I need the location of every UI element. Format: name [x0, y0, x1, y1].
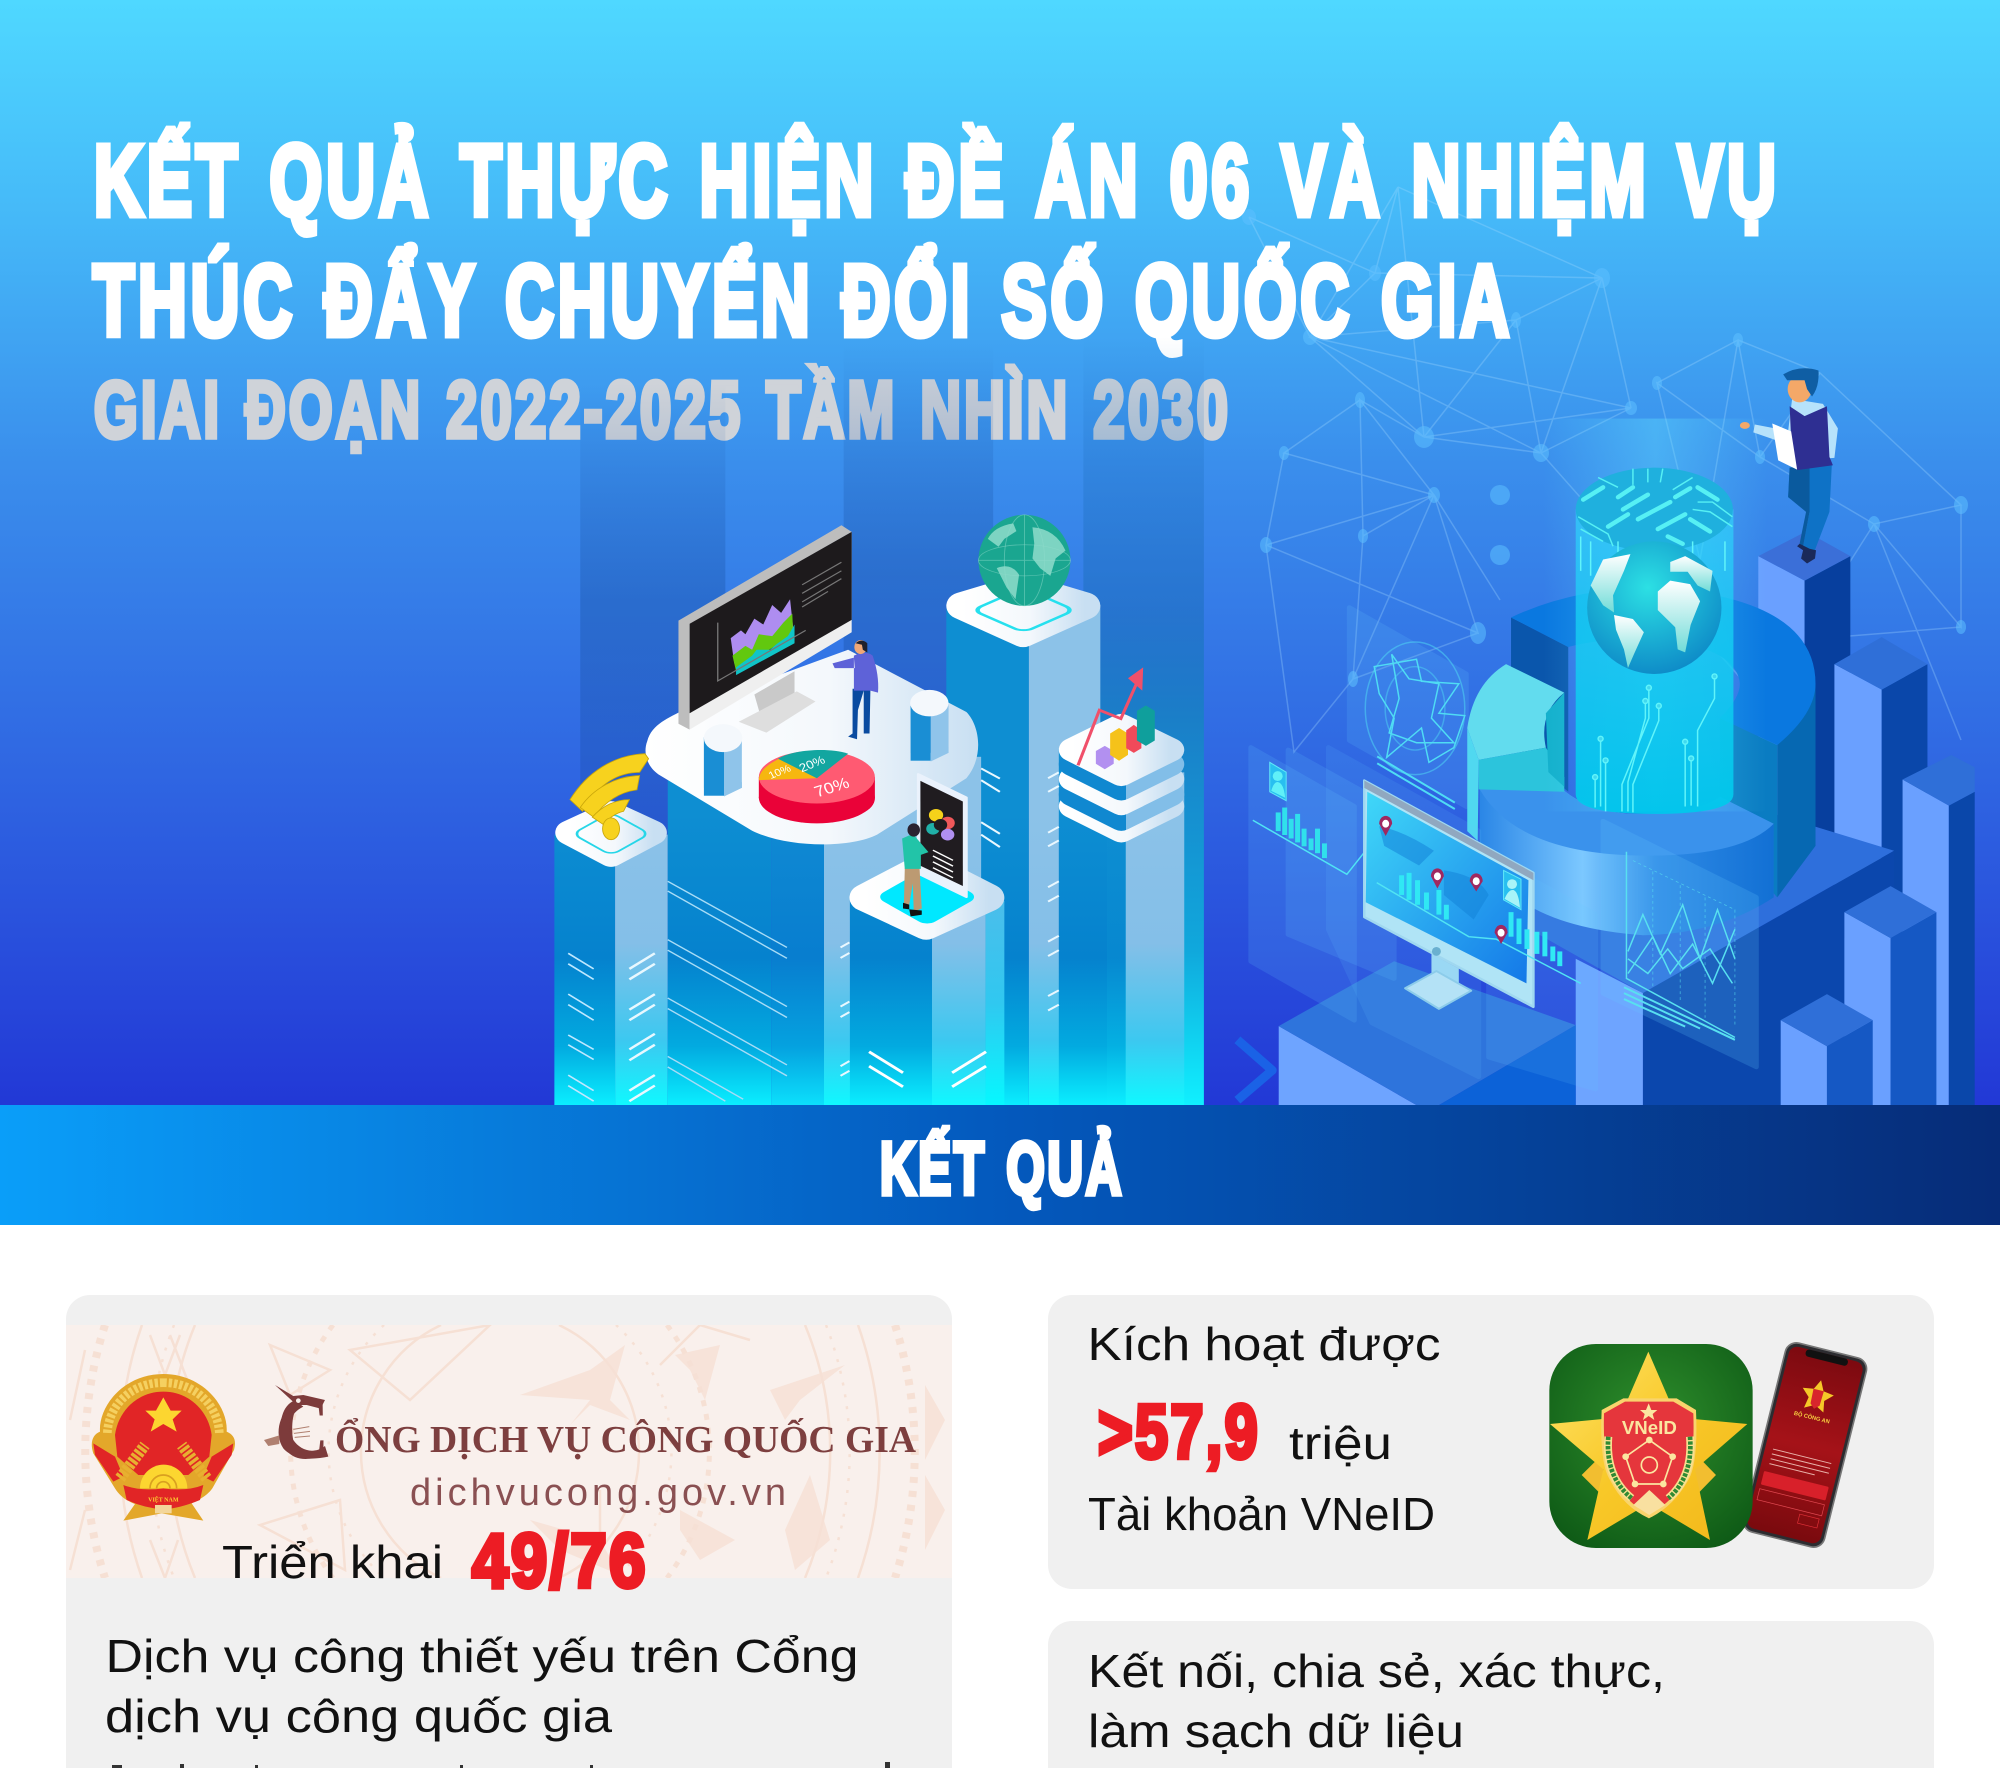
card: public services: [66, 1295, 952, 1768]
platform: main cloud: [646, 650, 978, 844]
icon: bar chart with arrow: [1078, 667, 1155, 769]
card description: [105, 1630, 858, 1742]
tower: central column: [668, 757, 1000, 1105]
base block: [1534, 815, 1894, 1105]
cylinder: lower ring: [1480, 777, 1774, 935]
clipped tops of next line: [112, 1762, 890, 1768]
rollout label: Triển khai: [222, 1536, 443, 1588]
card: VNeID accounts: [1048, 1295, 1934, 1589]
icon: phone with gears: [918, 774, 966, 897]
icon: chevron: [1237, 1040, 1272, 1100]
VNeID unit: triệu: [1289, 1417, 1392, 1469]
illustration: data towers: [554, 337, 1204, 1105]
subtitle: GIAI ĐOẠN 2022-2025 TẦM NHÌN 2030: [94, 365, 1231, 454]
small monitor with map: [1364, 781, 1581, 1009]
cylinder: back ring: [1511, 588, 1816, 897]
icon: national emblem: VIỆT NAM: [148, 1496, 179, 1504]
section band: [0, 1105, 2000, 1225]
icon: national emblem: [92, 1374, 235, 1521]
circuit disc: [1576, 468, 1733, 551]
pie chart: 70%: [811, 774, 852, 801]
pie chart: [759, 750, 875, 823]
icon: earth: [1587, 541, 1721, 674]
radar star graphic: [1365, 642, 1465, 809]
card description: dịch vụ công quốc gia: [105, 1690, 612, 1742]
icon: portal logo: C: [277, 1379, 329, 1478]
background network mesh: [1249, 187, 1961, 752]
rollout number: 49/76: [472, 1519, 648, 1604]
VNeID label bottom: Tài khoản VNeID: [1088, 1488, 1435, 1540]
icon: green globe: [978, 515, 1070, 606]
icon: VNeID phone: [1741, 1340, 1869, 1550]
line chart panel: [1624, 852, 1735, 1040]
portal url: dichvucong.gov.vn: [410, 1472, 786, 1514]
VNeID number: >57,9: [1098, 1390, 1260, 1475]
data connection text: Kết nối, chia sẻ, xác thực,: [1088, 1645, 1665, 1697]
VNeID label top: Kích hoạt được: [1088, 1318, 1440, 1370]
title: [93, 124, 1780, 357]
icon: VNeID app: VNeID: [1622, 1417, 1677, 1438]
card description: Dịch vụ công thiết yếu trên Cổng: [106, 1630, 858, 1682]
icon: portal logo: [264, 1379, 329, 1478]
card: data connection: [1048, 1621, 1934, 1768]
hologram column: [1560, 418, 1746, 814]
pie chart: 10%: [767, 763, 793, 782]
hero background: [0, 0, 2000, 1106]
person at phone: [902, 823, 928, 916]
circuit traces: [1581, 536, 1725, 812]
illustration: digital city: [1237, 368, 1975, 1105]
faint glass panels: [1251, 608, 1756, 1089]
icon: server right: [910, 690, 949, 761]
icon: server left: [704, 737, 742, 796]
cylinder: teal wedge: [1467, 664, 1564, 841]
data connection text: làm sạch dữ liệu: [1088, 1705, 1464, 1757]
tower: wifi column: [554, 812, 668, 1105]
tower: chart column: [1072, 726, 1184, 1105]
person on pedestal: [1740, 368, 1838, 563]
person at monitor: [832, 640, 878, 739]
column: back right: [1834, 637, 1928, 936]
columns: front right: [1781, 755, 1975, 1105]
banner: [66, 1325, 952, 1578]
drum pattern: [70, 1325, 945, 1578]
user card with bars: [1252, 762, 1363, 876]
icon: wifi: [570, 754, 649, 840]
column: person pedestal: [1758, 532, 1850, 841]
tower: globe column: [946, 588, 1126, 1105]
icon: VNeID phone: BỘ CÔNG AN: [1793, 1409, 1831, 1425]
network nodes: [1242, 209, 1968, 687]
band heading: KẾT QUẢ: [880, 1127, 1124, 1210]
icon: VNeID app: [1549, 1344, 1753, 1548]
pie chart: 20%: [797, 753, 827, 775]
tower: phone column: [850, 866, 1004, 1105]
icon: big monitor: [678, 525, 852, 733]
portal name: ỔNG DỊCH VỤ CÔNG QUỐC GIA: [335, 1417, 917, 1461]
block: bottom left: [1279, 961, 1576, 1105]
data connection text: [1088, 1645, 1665, 1757]
